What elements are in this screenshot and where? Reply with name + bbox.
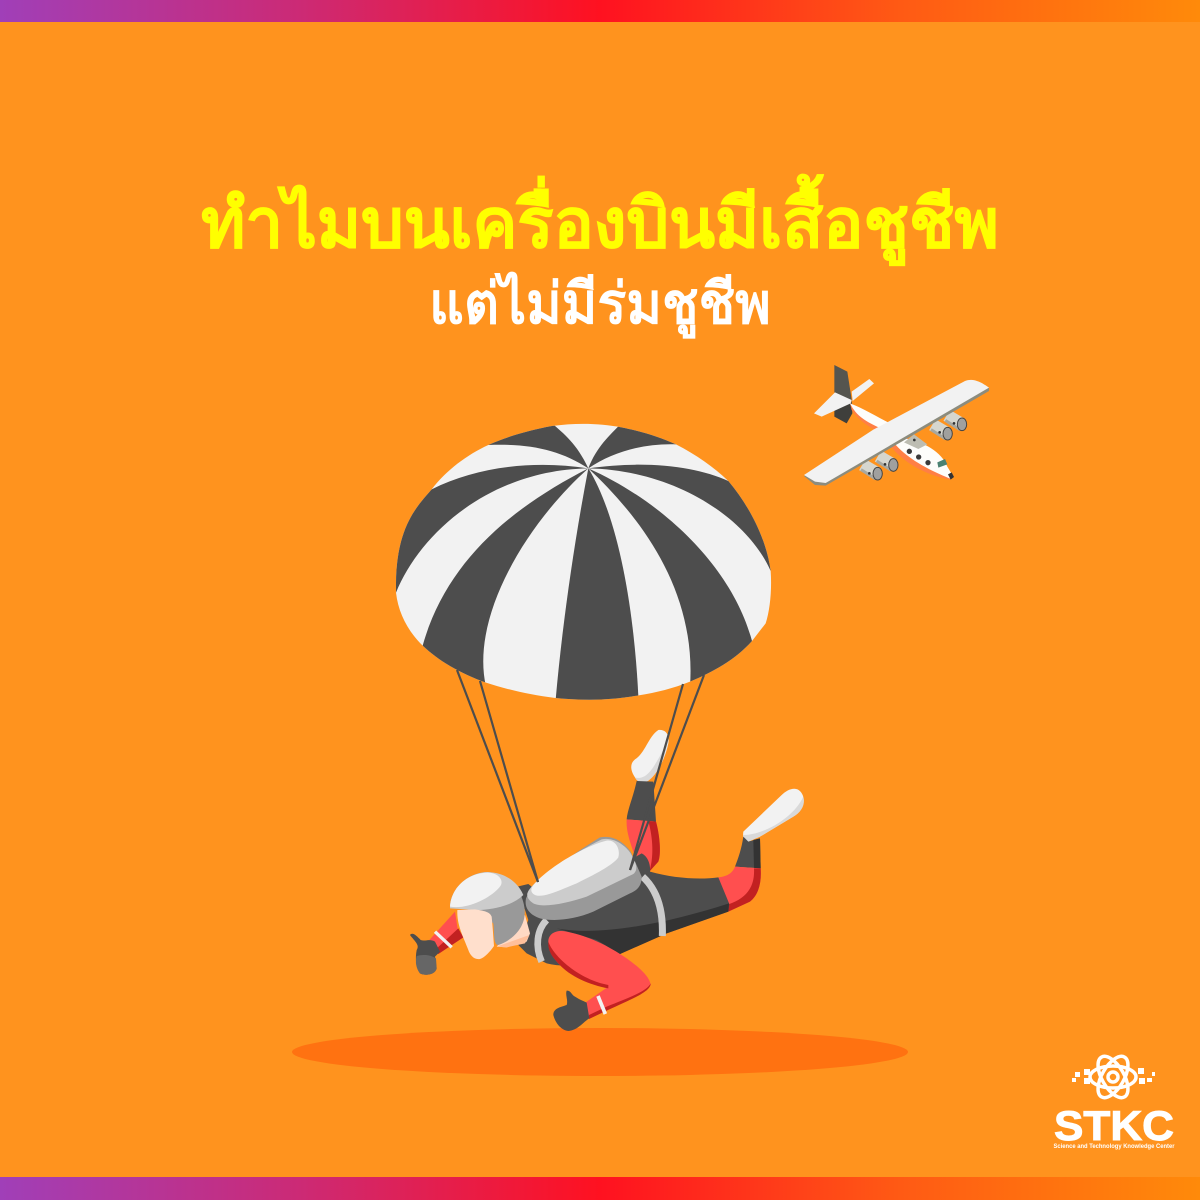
centre panel [555, 468, 639, 703]
far leg [627, 781, 656, 822]
nose [948, 472, 954, 480]
logo pixel dots [1072, 1068, 1155, 1084]
near thigh [718, 867, 761, 912]
title [201, 174, 999, 339]
helmet shell [450, 872, 525, 945]
neck [497, 915, 530, 947]
engines [861, 415, 967, 480]
logo tagline: Science and Technology Knowledge Center [1054, 1144, 1175, 1150]
parachute canopy [390, 423, 777, 703]
tailplane [814, 392, 852, 417]
near hand glove [553, 991, 589, 1031]
far arm [429, 912, 463, 954]
windows [906, 448, 931, 466]
torso shadow [557, 903, 729, 954]
skydiver [410, 730, 804, 1031]
near arm shadow [548, 942, 608, 988]
face [457, 909, 494, 959]
ground shadow [292, 1028, 908, 1076]
far foot shoe [631, 730, 669, 782]
wing [804, 380, 989, 483]
near leg shoe [743, 789, 804, 842]
harness front [538, 920, 547, 962]
near arm cuff [598, 996, 605, 1014]
wing underside [804, 388, 989, 486]
harness back [643, 877, 662, 936]
cockpit window [937, 459, 947, 468]
torso [517, 853, 729, 966]
left panel [390, 465, 588, 593]
near arm [548, 931, 651, 1019]
parachute cords [457, 670, 704, 882]
wing strut [904, 434, 927, 449]
helmet mid [450, 872, 523, 910]
fuselage [850, 403, 953, 478]
far arm cuff [435, 932, 452, 947]
title: ทำไมบนเครื่องบินมีเสื้อชูชีพ [201, 174, 999, 266]
bottom gradient bar [0, 1177, 1200, 1200]
lower right panel [588, 468, 757, 687]
far hand glove [410, 934, 440, 975]
fuselage underside [850, 403, 953, 480]
lower left panel [413, 468, 588, 687]
tail fin upper [834, 365, 852, 402]
near calf [735, 837, 761, 868]
title: แต่ไม่มีร่มชูชีพ [429, 271, 771, 339]
logo wordmark: STKC [1054, 1102, 1174, 1149]
helmet top [450, 873, 502, 907]
top gradient bar [0, 0, 1200, 22]
airplane [804, 365, 989, 486]
right panel [588, 465, 777, 571]
top left panel [488, 426, 588, 468]
logo atom icon [1090, 1052, 1136, 1102]
tail fin lower [834, 402, 852, 423]
STKC logo [1054, 1052, 1175, 1150]
backpack [526, 837, 642, 920]
top right panel [588, 426, 676, 468]
